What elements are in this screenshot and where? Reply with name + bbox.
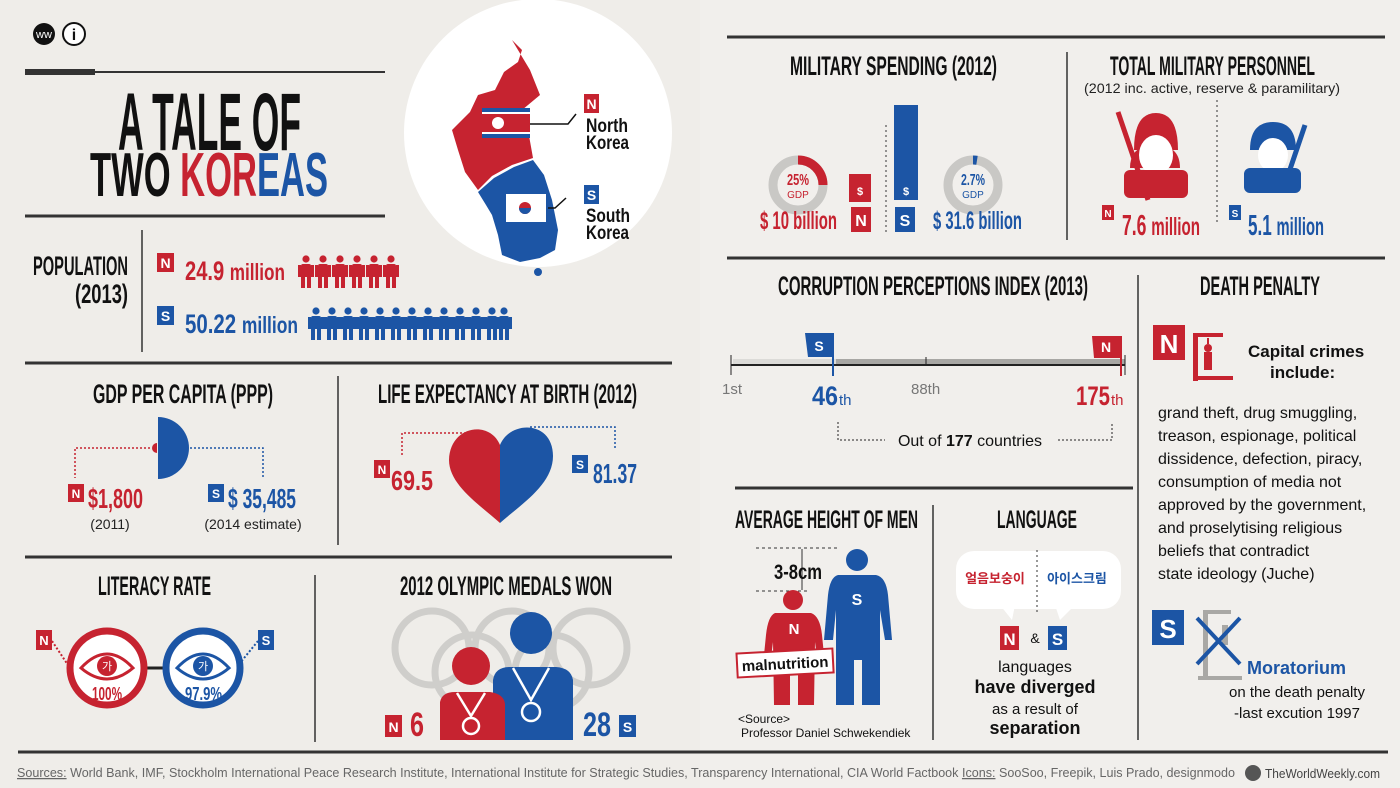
label: North Korea: North: [586, 116, 628, 137]
military spending chart: S: [900, 213, 911, 230]
military spending chart: GDP: [962, 190, 984, 201]
label: North Korea: Korea: [586, 133, 629, 154]
CPI chart: 88th: [911, 381, 940, 398]
map circle: [404, 0, 672, 276]
label: South Korea: Korea: [586, 223, 629, 244]
logo: ww: [35, 29, 52, 41]
population heading: (2013): [75, 279, 128, 309]
GDP chart: (2014 estimate): [204, 516, 302, 532]
GDP chart: $1,800: [88, 483, 143, 514]
soldiers: 7.6 million: [1122, 210, 1200, 242]
military spending chart: $: [857, 186, 863, 198]
footer sources: Sources: World Bank, IMF, Stockholm International Peace Research Institute, International Institute for Strategic Studies, Transparency International, CIA World Factbook Icons: SooSoo, Freepik, Luis Prado, designmodo: [17, 766, 1235, 780]
height heading: AVERAGE HEIGHT OF MEN: [735, 506, 918, 534]
heart chart: [374, 427, 637, 523]
literacy chart: 가: [198, 660, 208, 673]
GDP chart: (2011): [90, 516, 130, 532]
language chart: [956, 550, 1121, 738]
soldiers: N: [1104, 209, 1112, 220]
height chart: N: [789, 621, 799, 638]
language chart: 얼음보숭이: [965, 571, 1025, 586]
population S: [157, 306, 512, 340]
height chart: malnutrition: [741, 654, 829, 675]
military spending chart: GDP: [787, 190, 809, 201]
death penalty N: consumption of media not: [1158, 474, 1342, 491]
military spending chart: 25%: [787, 172, 809, 189]
military spending chart: $ 10 billion: [760, 207, 837, 235]
label: North Korea: N: [586, 96, 597, 112]
GDP chart: N: [72, 487, 80, 501]
language chart: as a result of: [992, 701, 1079, 718]
literacy chart: 가: [102, 660, 112, 673]
military personnel heading: [1084, 51, 1340, 96]
literacy chart: S: [262, 633, 271, 648]
literacy heading: LITERACY RATE: [98, 571, 211, 601]
height chart: Professor Daniel Schwekendiek: [741, 726, 911, 740]
CPI chart: 175: [1076, 381, 1110, 411]
language chart: 아이스크림: [1047, 571, 1107, 586]
population N: N: [160, 255, 171, 271]
height chart: [736, 548, 911, 740]
height chart: <Source>: [738, 712, 790, 726]
footer logo: TheWorldWeekly.com: [1265, 766, 1380, 781]
heart chart: 81.37: [593, 458, 637, 489]
olympic chart: S: [623, 719, 632, 735]
language chart: N: [1003, 630, 1016, 649]
language chart: &: [1030, 630, 1040, 646]
death penalty N: N: [1160, 329, 1178, 359]
death penalty S: on the death penalty: [1229, 684, 1365, 701]
GDP chart: [68, 417, 302, 532]
military spending heading: MILITARY SPENDING (2012): [790, 51, 997, 81]
text: A TALE OF: [118, 77, 301, 168]
label: South Korea: South: [586, 206, 630, 227]
military personnel heading: (2012 inc. active, reserve & paramilitary): [1084, 80, 1340, 96]
label: South Korea: S: [587, 187, 596, 203]
military spending chart: N: [855, 213, 867, 230]
olympic chart: N: [388, 719, 399, 735]
literacy chart: N: [39, 633, 49, 648]
soldiers: 5.1 million: [1248, 210, 1324, 242]
CPI chart: [722, 333, 1125, 450]
height chart: S: [852, 592, 863, 609]
heart chart: S: [576, 458, 584, 472]
death penalty N: treason, espionage, political: [1158, 428, 1356, 445]
GDP heading: GDP PER CAPITA (PPP): [93, 379, 273, 409]
life expectancy heading: LIFE EXPECTANCY AT BIRTH (2012): [378, 379, 637, 409]
death penalty N: include:: [1270, 363, 1335, 382]
death penalty N: Capital crimes: [1248, 342, 1364, 361]
heart chart: 69.5: [391, 465, 433, 496]
olympic chart: 28: [583, 706, 611, 744]
death penalty N: and proselytising religious: [1158, 520, 1342, 537]
population heading: POPULATION: [33, 251, 128, 281]
language chart: separation: [989, 718, 1081, 738]
death penalty N: beliefs that contradict: [1158, 543, 1310, 560]
death penalty N: [1153, 325, 1366, 583]
olympic chart: 6: [410, 706, 424, 744]
population S: S: [161, 308, 170, 324]
death penalty N: approved by the government,: [1158, 497, 1366, 514]
population S: 50.22 million: [185, 309, 298, 339]
CPI chart: 46: [812, 381, 838, 411]
military spending chart: $ 31.6 billion: [933, 207, 1022, 235]
military spending chart: [760, 105, 1022, 235]
death penalty S: -last excution 1997: [1234, 705, 1360, 722]
language chart: have diverged: [974, 677, 1096, 697]
death penalty N: grand theft, drug smuggling,: [1158, 405, 1357, 422]
olympic chart: [385, 611, 636, 744]
population heading: [33, 251, 128, 309]
soldiers: S: [1232, 209, 1239, 220]
heart chart: N: [378, 463, 386, 477]
GDP chart: $ 35,485: [228, 483, 296, 514]
olympic heading: 2012 OLYMPIC MEDALS WON: [400, 571, 612, 601]
population N: [157, 253, 399, 288]
CPI chart: 1st: [722, 381, 743, 398]
soldiers: [1102, 100, 1324, 242]
death penalty N: dissidence, defection, piracy,: [1158, 451, 1362, 468]
CPI chart: th: [1111, 392, 1124, 409]
label: North Korea: [584, 94, 629, 154]
literacy chart: 97.9%: [185, 684, 222, 704]
death penalty S: [1152, 610, 1365, 722]
language heading: LANGUAGE: [997, 506, 1077, 534]
literacy chart: [36, 630, 274, 705]
title: [90, 77, 328, 210]
CPI heading: CORRUPTION PERCEPTIONS INDEX (2013): [778, 271, 1088, 301]
literacy chart: 100%: [92, 684, 122, 704]
CPI chart: Out of 177 countries: [898, 433, 1042, 450]
population N: 24.9 million: [185, 256, 285, 286]
language chart: S: [1052, 630, 1063, 649]
death penalty N: state ideology (Juche): [1158, 566, 1315, 583]
CPI chart: th: [839, 392, 852, 409]
CPI chart: S: [814, 338, 824, 354]
logo: i: [72, 27, 76, 44]
language chart: languages: [998, 659, 1072, 676]
death penalty S: S: [1159, 614, 1177, 644]
height chart: 3-8cm: [774, 561, 822, 584]
military spending chart: $: [903, 186, 909, 198]
death penalty S: Moratorium: [1247, 658, 1346, 678]
military spending chart: 2.7%: [961, 172, 985, 189]
GDP chart: S: [212, 487, 220, 501]
label: South Korea: [584, 185, 630, 244]
title: TWO KOREAS: [90, 141, 328, 210]
CPI chart: N: [1101, 339, 1111, 355]
logo: [33, 23, 85, 45]
